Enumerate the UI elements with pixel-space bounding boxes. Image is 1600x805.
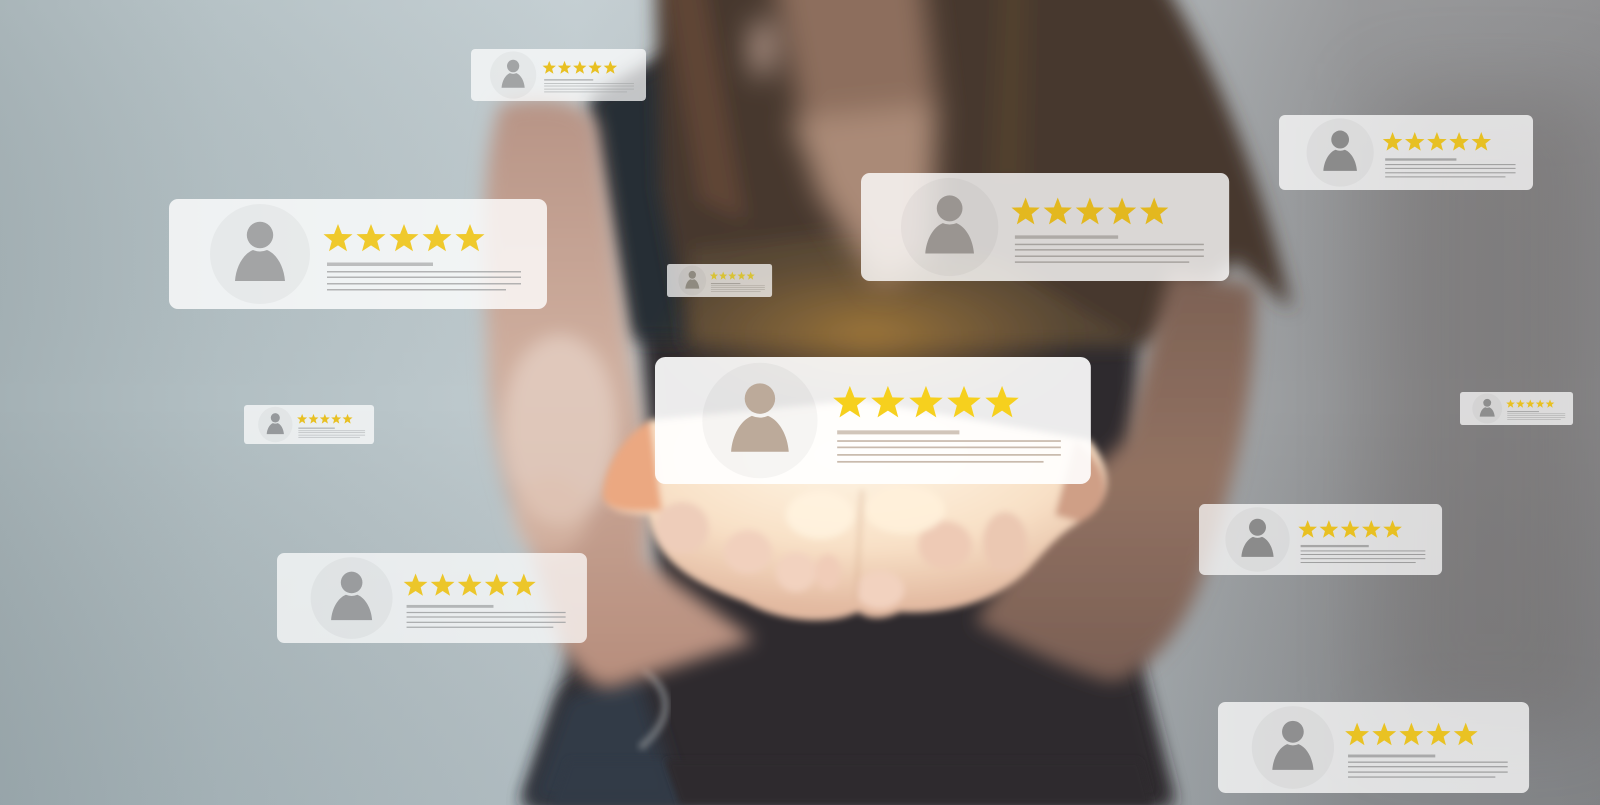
review card: lower left (277, 553, 587, 643)
review card: left large (169, 199, 547, 309)
review card: top small (471, 49, 646, 101)
warm glow above hands (660, 250, 1080, 420)
blurred woman: dark top and skirt (525, 40, 1172, 805)
review card: bottom right (1218, 702, 1529, 793)
review card: top right (1279, 115, 1533, 190)
review card: tiny blurred (667, 264, 772, 297)
review card: right small (1460, 392, 1573, 425)
review card: left small (244, 405, 374, 444)
open glowing hands (603, 400, 1107, 620)
review card: upper centre (861, 173, 1229, 281)
blurred woman: arms (485, 99, 1255, 688)
review card: main highlighted (655, 357, 1091, 484)
blurred woman: hair (655, 0, 1292, 350)
review card: right middle (1199, 504, 1442, 575)
blurred woman: chest (750, 0, 938, 290)
